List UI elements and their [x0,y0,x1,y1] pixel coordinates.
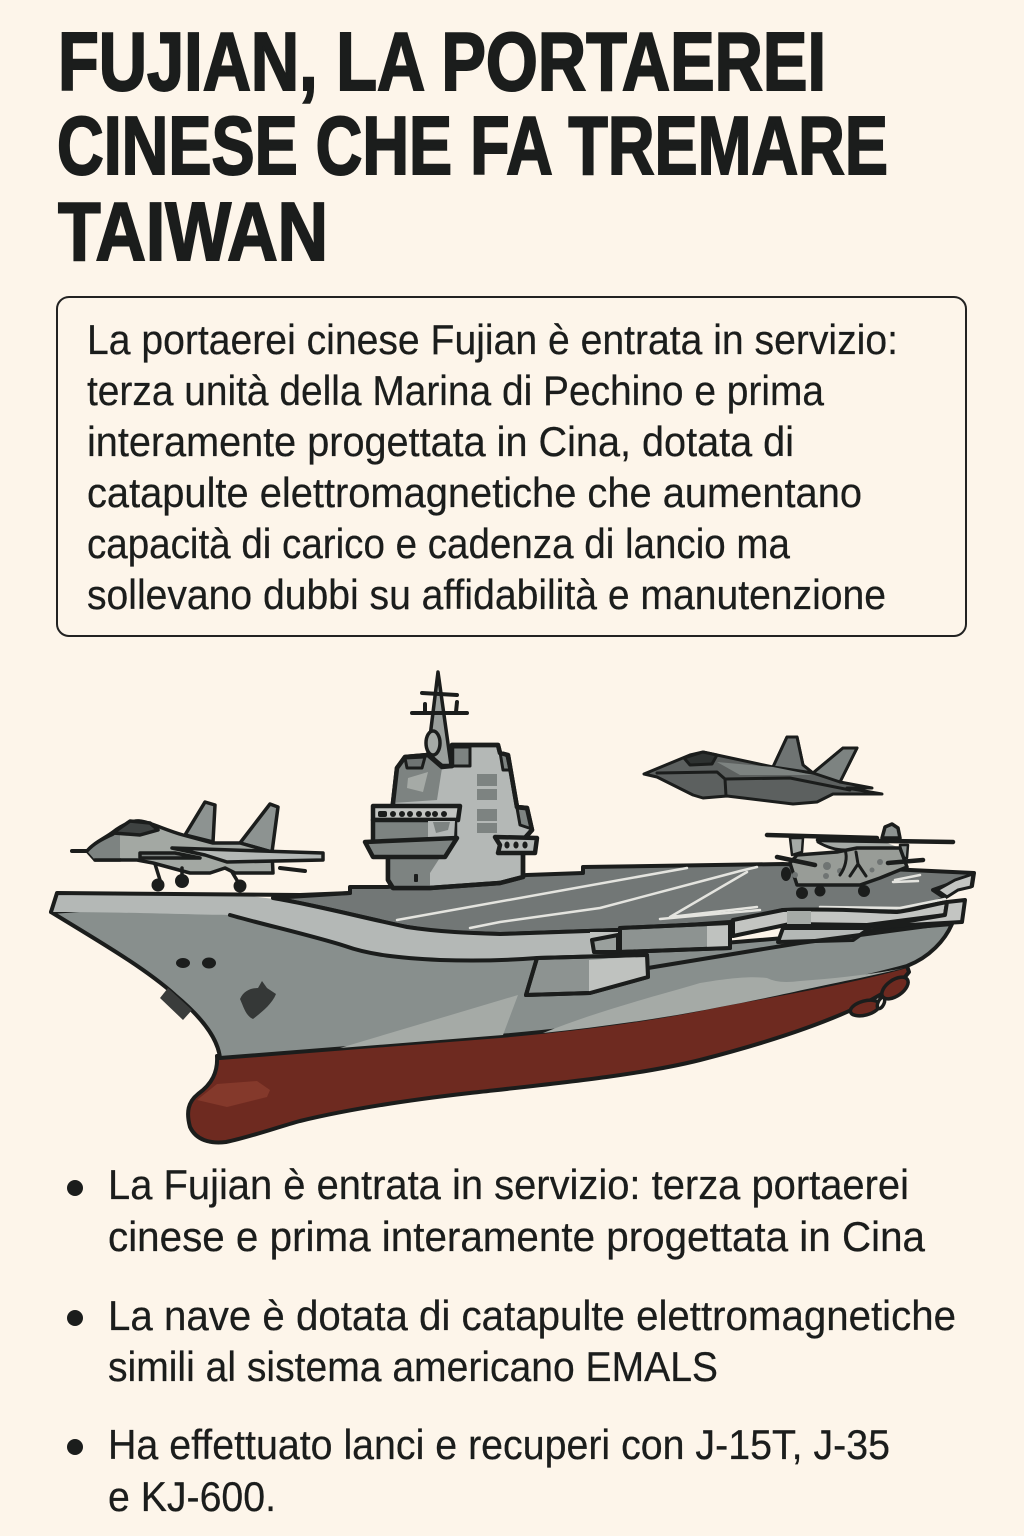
rudder and propeller [849,973,912,1019]
main gallery [365,806,460,857]
island superstructure [365,672,537,888]
bullet 1: La Fujian è entrata in servizio: terza portaerei [108,1161,909,1208]
aircraft: KJ-600 early warning on deck [767,824,953,899]
hull side [51,900,952,1058]
illustration: aircraft carrier Fujian [51,672,974,1142]
title [57,15,888,278]
title: FUJIAN, LA PORTAEREI [58,15,826,108]
red lower hull [188,966,909,1142]
bullet 2 [67,1292,956,1390]
aircraft: J-15T fighter on deck [72,802,323,892]
bullet 3: e KJ-600. [108,1473,276,1520]
bridge windows [477,774,497,833]
bullet list [67,1161,956,1520]
bullet 1 [67,1161,926,1260]
mast [412,672,467,767]
panel: intro text box [57,297,966,636]
panel: intro text box: sollevano dubbi su affidabilità e manutenzione [87,571,886,618]
bow notch [937,874,973,897]
bullet 2: simili al sistema americano EMALS [108,1343,718,1390]
panel: intro text box: terza unità della Marina di Pechino e prima [87,367,825,414]
flight deck [273,864,974,934]
panel: intro text box: La portaerei cinese Fujian è entrata in servizio: [87,316,898,363]
bow details: hawse holes, anchor, fairlead [160,958,276,1020]
title: TAIWAN [58,185,328,278]
bullet 3 [67,1421,890,1520]
side gallery [495,837,537,853]
panel: intro text box: catapulte elettromagnetiche che aumentano [87,469,862,516]
aircraft: J-35 stealth fighter in flight [644,737,882,804]
light deck band [51,893,620,961]
panel: intro text box: interamente progettata in Cina, dotata di [87,418,794,465]
bullet 1: cinese e prima interamente progettata in Cina [108,1213,926,1260]
bullet 3: Ha effettuato lanci e recuperi con J-15T, J-35 [108,1421,890,1468]
bullet 2: La nave è dotata di catapulte elettromagnetiche [108,1292,956,1339]
panel: intro text box: capacità di carico e cadenza di lancio ma [87,520,791,567]
sponsons [526,900,965,995]
